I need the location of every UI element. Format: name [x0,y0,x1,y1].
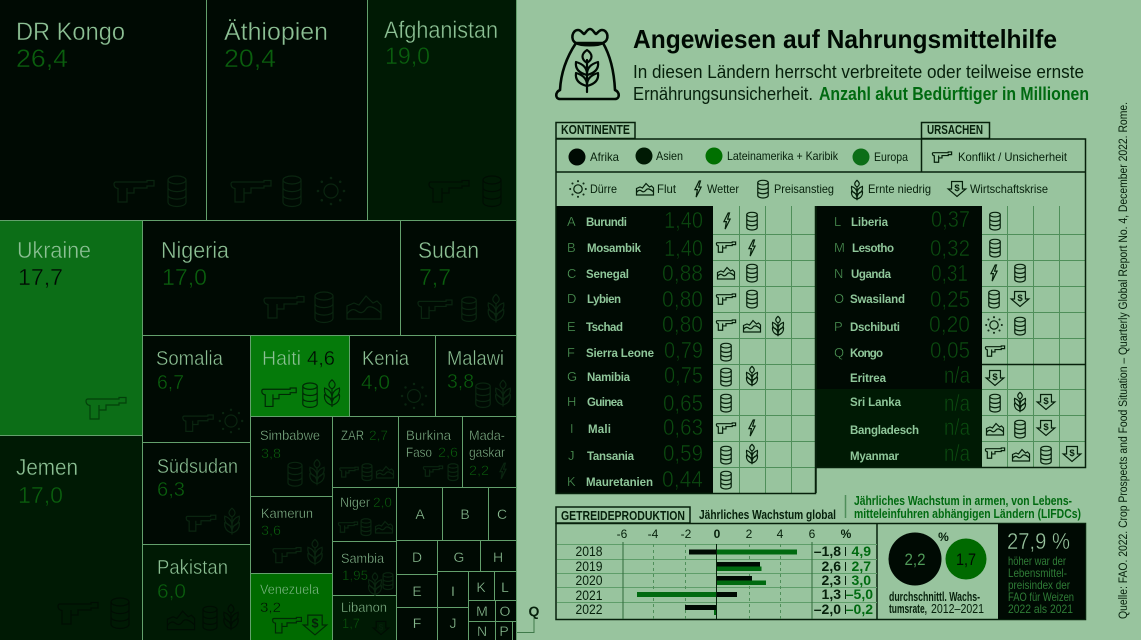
bar chart: annual growth: 2018 [576,544,602,559]
cell: DR Kongo [0,0,206,220]
table: left countries: I [570,421,574,436]
bar chart: annual growth: –2,0 [814,601,841,617]
legend: causes: Ernte niedrig [868,182,931,196]
cause icons: right table [985,212,1081,464]
cell: Jemen: Jemen [16,454,78,480]
legend: causes: Flut [657,182,677,196]
cell: Libanon: Libanon [341,599,387,615]
table: left countries: Tschad [586,322,623,334]
heading: LIFDC growth: mitteleinfuhren abhängigen Ländern (LIFDCs) [854,507,1081,521]
cell: Somalia: Somalia [156,348,224,370]
table: right countries [816,206,1086,493]
table: right countries: n/a [944,362,970,388]
cell: Kenia [350,336,435,416]
callout: wheat price index [998,524,1085,619]
legend: causes [570,150,1068,200]
small lettered cells A to Q: D [412,549,422,565]
bottom panel: grain production [556,494,1086,620]
table: right countries: P [834,319,843,334]
small lettered cells A to Q: J [450,615,456,631]
tab: Kontinente: KONTINENTE [561,123,630,137]
average growth circles: 2,2 [904,550,926,569]
table: left countries: A [567,214,576,229]
table: left countries: Mosambik [587,243,642,255]
cell: Sudan: Sudan [418,237,479,263]
cell: Pakistan [143,545,250,640]
cell: Nigeria [143,221,400,335]
callout: wheat price index: 2022 als 2021 [1008,602,1073,616]
table: left countries: 0,59 [663,440,703,466]
subtitle: Anzahl akut Bedürftiger in Millionen [819,84,1089,104]
bar chart: annual growth: 0 [714,527,721,541]
average growth circles: durchschnittl. Wachs- [889,590,980,604]
cell: ZAR: ZAR [341,427,364,443]
table: left countries: G [567,369,577,384]
bar chart: annual growth: -2 [681,527,692,541]
cell: ZAR [333,417,398,487]
table: right countries: Uganda [851,269,892,281]
bar chart: annual growth: 2 [746,527,753,541]
average growth circles: tumsrate, [889,602,927,616]
small lettered cells A to Q: K [476,579,486,595]
small lettered cells A to Q: L [501,579,509,595]
small lettered cells A to Q: H [493,549,503,565]
cell: Madagaskar: 2,2 [469,462,489,478]
bar chart: annual growth: –5,0 [846,586,873,602]
legend: continents: Asien [656,149,683,163]
table: right countries: n/a [944,390,970,416]
cell: Kenia: 4,0 [361,372,390,394]
table: right countries: M [834,240,845,255]
cell: Simbabwe: 3,8 [261,445,281,461]
cell: Libanon: 1,7 [342,615,360,631]
table: left countries: Burundi [586,217,627,229]
callout: Q: Q [529,603,540,619]
legend [556,122,1086,206]
small lettered cells A to Q: F [413,615,421,631]
callout: Q [517,603,540,632]
table: left countries: Sierra Leone [586,348,654,360]
bar chart: annual growth: 1,3 [822,586,841,602]
cell: Simbabwe [251,417,332,496]
cell: Somalia: 6,7 [157,372,184,394]
bar chart: annual growth: 2,6 [822,558,841,574]
cell: Afghanistan [368,0,516,220]
table: left countries: 0,44 [662,466,703,492]
small lettered cells A to Q: C [497,506,507,522]
bar chart: annual growth: 3,0 [852,572,871,588]
table: right countries: Lesotho [852,243,894,255]
bar chart: annual growth: -4 [648,527,659,541]
small lettered cells A to Q: B [460,506,470,522]
cell: Burkina Faso: Faso [406,444,432,460]
legend frame [556,139,1086,206]
cell: Niger: Niger [340,494,370,510]
tab: Ursachen: URSACHEN [927,123,983,137]
legend: causes: Preisanstieg [774,182,834,196]
table: left countries: B [567,240,576,255]
cell: Südsudan [143,443,250,544]
table: right countries: Bangladesch [850,425,919,437]
cell: Niger [333,488,396,541]
cell: Kamerun [251,497,332,573]
cell: Sambia [333,542,396,596]
cell: Afghanistan: 19,0 [385,43,430,70]
table: right countries: Kongo [850,348,883,360]
small lettered cells A to Q: N [477,623,487,639]
callout: wheat price index: 27,9 % [1007,528,1070,554]
cell: Malawi: 3,8 [447,371,474,393]
bar chart: annual growth: 2,3 [822,572,841,588]
table: left countries: 1,40 [664,235,703,261]
cell: Äthiopien: 20,4 [224,45,276,73]
heading: global growth: Jährliches Wachstum global [699,508,836,522]
cell: Südsudan: 6,3 [157,479,185,501]
cell: Sambia: 1,95 [342,567,368,583]
bar chart: annual growth: 2020 [576,573,602,588]
table: left countries: C [567,266,576,281]
small lettered cells A to Q: P [499,623,509,639]
cell: Pakistan: 6,0 [157,581,186,603]
cell: Südsudan: Südsudan [157,456,238,478]
table: left countries: 1,40 [664,207,703,233]
table: left countries: E [567,319,576,334]
cell: Kamerun: 3,6 [261,522,281,538]
bar chart: annual growth: % [841,527,852,541]
table: left countries: Mauretanien [586,477,653,489]
table: right countries: 0,32 [930,235,970,261]
cell: Äthiopien: Äthiopien [224,18,328,46]
cell: Simbabwe: Simbabwe [260,427,320,443]
cell: Madagaskar [463,417,516,487]
table: left countries: 0,75 [664,362,703,388]
cell: Haiti: 4,6 [307,348,335,370]
cell: Malawi [436,336,516,416]
cell: Haiti [251,336,349,416]
cell: Libanon [333,596,396,640]
cell: Burkina Faso: Burkina [406,427,451,443]
bar chart: annual growth [557,527,877,619]
table: left countries: Namibia [587,372,631,384]
title: Angewiesen auf Nahrungsmittelhilfe [633,24,1057,54]
table: left countries: 0,79 [664,337,703,363]
callout: wheat price index: preisindex der [1008,578,1070,592]
average growth circles: 2012–2021 [931,602,984,616]
cell: Äthiopien [207,0,367,220]
subtitle: Ernährungsunsicherheit. [633,84,813,104]
table: right countries: Sri Lanka [850,397,902,409]
table: left countries: 0,65 [663,390,703,416]
table: left countries: Guinea [587,397,624,409]
table: left countries: K [567,474,576,489]
cell: Venezuela [251,574,332,640]
bar chart: annual growth: -6 [617,527,628,541]
cell: Burkina Faso: 2,6 [438,444,458,460]
small lettered cells A to Q: A [415,506,425,522]
cell: Ukraine: 17,7 [18,264,63,290]
average growth circles: 1,7 [956,550,976,569]
table: right countries: Q [834,345,844,360]
table: left countries: 0,63 [663,414,703,440]
callout: wheat price index: Lebensmittel- [1008,566,1067,580]
heading: LIFDC growth [846,494,1081,521]
table: right countries: n/a [944,440,970,466]
tab: Getreideproduktion: GETREIDEPRODUKTION [561,509,685,523]
small lettered cells A to Q: O [500,603,511,619]
cause icons: left table [716,212,784,489]
table: left countries: Senegal [586,269,629,281]
small lettered cells A to Q: M [476,603,488,619]
average growth circles [888,530,986,616]
small lettered cells A to Q: G [454,549,464,565]
bar chart: annual growth: 4,9 [852,543,871,559]
table: left countries: 0,88 [662,260,703,286]
small lettered cells A to Q [397,488,516,640]
table: right countries: O [834,291,844,306]
cell: Jemen: 17,0 [18,482,63,508]
cell: Sambia: Sambia [341,550,384,566]
bar chart: annual growth: 6 [809,527,816,541]
cell: Madagaskar: Mada- [469,427,505,443]
legend: causes: Wirtschaftskrise [970,182,1048,196]
table: left countries: Tansania [587,451,635,463]
cell: Jemen [0,436,142,640]
cell: Malawi: Malawi [447,348,504,370]
subtitle: In diesen Ländern herrscht verbreitete oder teilweise ernste [633,62,1084,82]
table: right countries: Swasiland [850,294,905,306]
bar chart: annual growth: 2,7 [852,558,871,574]
cell: Ukraine: Ukraine [17,237,91,263]
table: left countries: Lybien [587,294,621,306]
cell: Sudan [401,221,516,335]
cell: Sudan: 7,7 [419,264,451,290]
table: right countries: Eritrea [850,373,887,385]
cell: Venezuela: 3,2 [260,599,281,615]
treemap: people in need by country [0,0,517,640]
table: left countries: D [567,291,576,306]
table: left countries: J [568,448,574,463]
cell: Ukraine [0,221,142,435]
cell: Kenia: Kenia [362,348,410,370]
table: left countries [556,206,816,494]
table: right countries: N [834,266,843,281]
table: right countries: Myanmar [850,451,900,463]
cell: Burkina Faso [399,417,462,487]
table: right countries: Liberia [851,217,889,229]
cell: Somalia [143,336,250,442]
table: right countries: 0,31 [931,260,968,286]
table: left countries: 0,80 [662,286,703,312]
bar chart: annual growth: 2021 [576,588,602,603]
cell: DR Kongo: 26,4 [16,45,68,73]
legend: continents: Lateinamerika + Karibik [727,149,839,163]
legend: continents: Europa [874,150,908,164]
legend: causes: Dürre [590,182,617,196]
table: right countries: 0,37 [931,206,970,232]
small lettered cells A to Q: I [451,583,455,599]
source note: Quelle: FAO. 2022. Crop Prospects and Food Situation – Quarterly Global Report No. 4, December 2022. Rome. [1118,102,1130,619]
table: left countries: 0,80 [662,311,703,337]
legend: continents: Afrika [590,150,619,164]
table: right countries: 0,25 [930,286,970,312]
callout: wheat price index: höher war der [1008,554,1066,568]
cell: DR Kongo: DR Kongo [16,18,125,46]
cell: Nigeria: 17,0 [162,264,207,290]
bar chart: annual growth: 2022 [576,602,602,617]
table: left countries: F [567,345,575,360]
table: left countries: H [567,394,576,409]
cell: Haiti: Haiti [262,348,301,370]
bar chart: annual growth: –1,8 [814,543,841,559]
bar chart: annual growth: 2019 [576,559,602,574]
cell: Afghanistan: Afghanistan [384,17,498,44]
legend: continents [568,148,908,166]
cell: Niger: 2,0 [373,494,392,510]
callout: wheat price index: FAO für Weizen [1008,590,1074,604]
table: right countries: Dschibuti [850,322,900,334]
bar chart: annual growth: –0,2 [846,601,873,617]
icon: grain sack [556,29,619,99]
cell: Pakistan: Pakistan [157,557,228,579]
cell: Venezuela: Venezuela [260,581,319,597]
table: right countries: 0,20 [929,311,970,337]
panel frame [556,524,1086,620]
small lettered cells A to Q: E [412,583,422,599]
legend: causes: Wetter [707,182,739,196]
table: right countries: 0,05 [930,337,970,363]
cell: Nigeria: Nigeria [161,237,229,263]
heading: LIFDC growth: Jährliches Wachstum in armen, von Lebens- [854,494,1072,508]
cell: Kamerun: Kamerun [261,505,313,521]
average growth circles: % [938,530,949,544]
subtitle [633,62,1089,104]
legend: causes: Konflikt / Unsicherheit [958,150,1068,164]
bar chart: annual growth: 4 [777,527,784,541]
table: right countries: n/a [944,414,970,440]
cell: ZAR: 2,7 [369,427,388,443]
table: left countries: Mali [588,424,611,436]
table: right countries: L [834,214,841,229]
cell: Madagaskar: gaskar [469,444,505,460]
